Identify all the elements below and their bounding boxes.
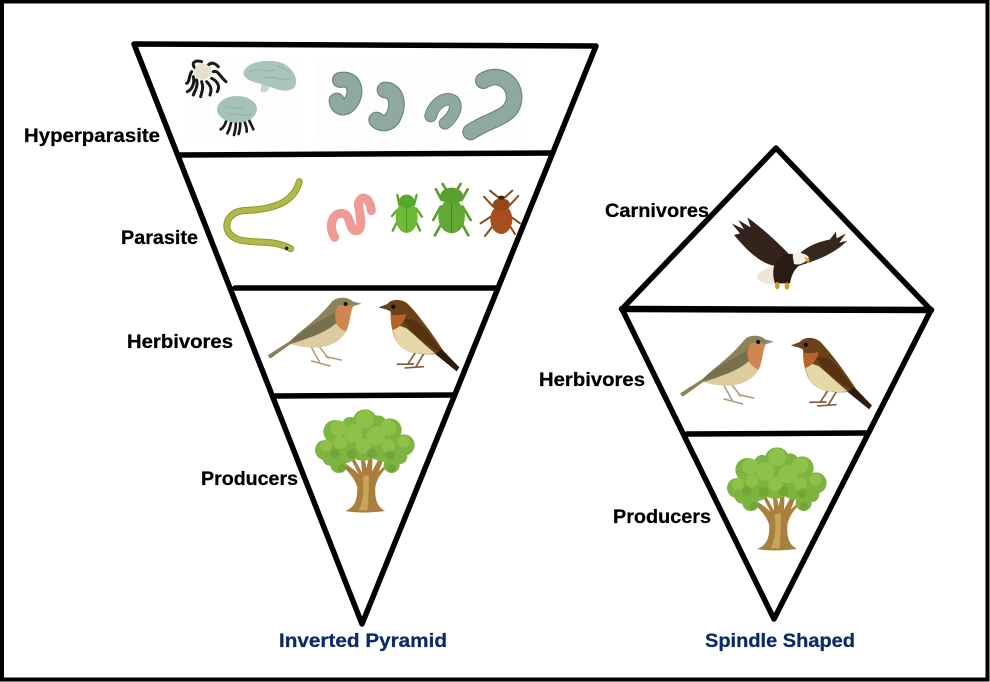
icon: large green beetle [433, 184, 471, 235]
labels: inverted pyramid levels: Producers [201, 469, 298, 490]
pyramid outline [134, 44, 596, 624]
labels: spindle levels: Carnivores [605, 201, 709, 222]
labels: inverted pyramid levels: Parasite [121, 228, 198, 249]
icon: hairy fungus [187, 61, 226, 97]
icon: green worm [227, 182, 299, 250]
spindle outline [622, 148, 931, 619]
labels: spindle levels: Producers [613, 507, 711, 528]
icon: eagle [732, 217, 847, 290]
panel: inverted pyramid [134, 44, 596, 624]
labels: inverted pyramid levels: Herbivores [127, 332, 233, 353]
icon: tree [727, 447, 827, 550]
icon: herbivore birds [680, 336, 872, 409]
caption: spindle shaped: Spindle Shaped [705, 630, 855, 652]
icon: brown beetle [481, 191, 520, 236]
caption: inverted pyramid: Inverted Pyramid [279, 630, 447, 652]
labels: inverted pyramid levels: Hyperparasite [24, 126, 160, 147]
icon: small green beetle [392, 195, 422, 233]
icon: brain-shaped fungus [243, 61, 296, 92]
labels: inverted pyramid levels [24, 126, 298, 490]
icon: grey worms [337, 77, 514, 132]
labels: spindle levels [539, 201, 711, 528]
hyperparasite illustrations [185, 57, 527, 140]
labels: spindle levels: Herbivores [539, 370, 645, 391]
parasite illustrations [227, 182, 520, 250]
icon: rooted brain fungus [217, 96, 257, 135]
icon: tree [315, 409, 415, 512]
icon: herbivore birds [268, 298, 459, 371]
panel: spindle shaped pyramid [622, 148, 931, 619]
icon: pink worm [331, 198, 371, 237]
